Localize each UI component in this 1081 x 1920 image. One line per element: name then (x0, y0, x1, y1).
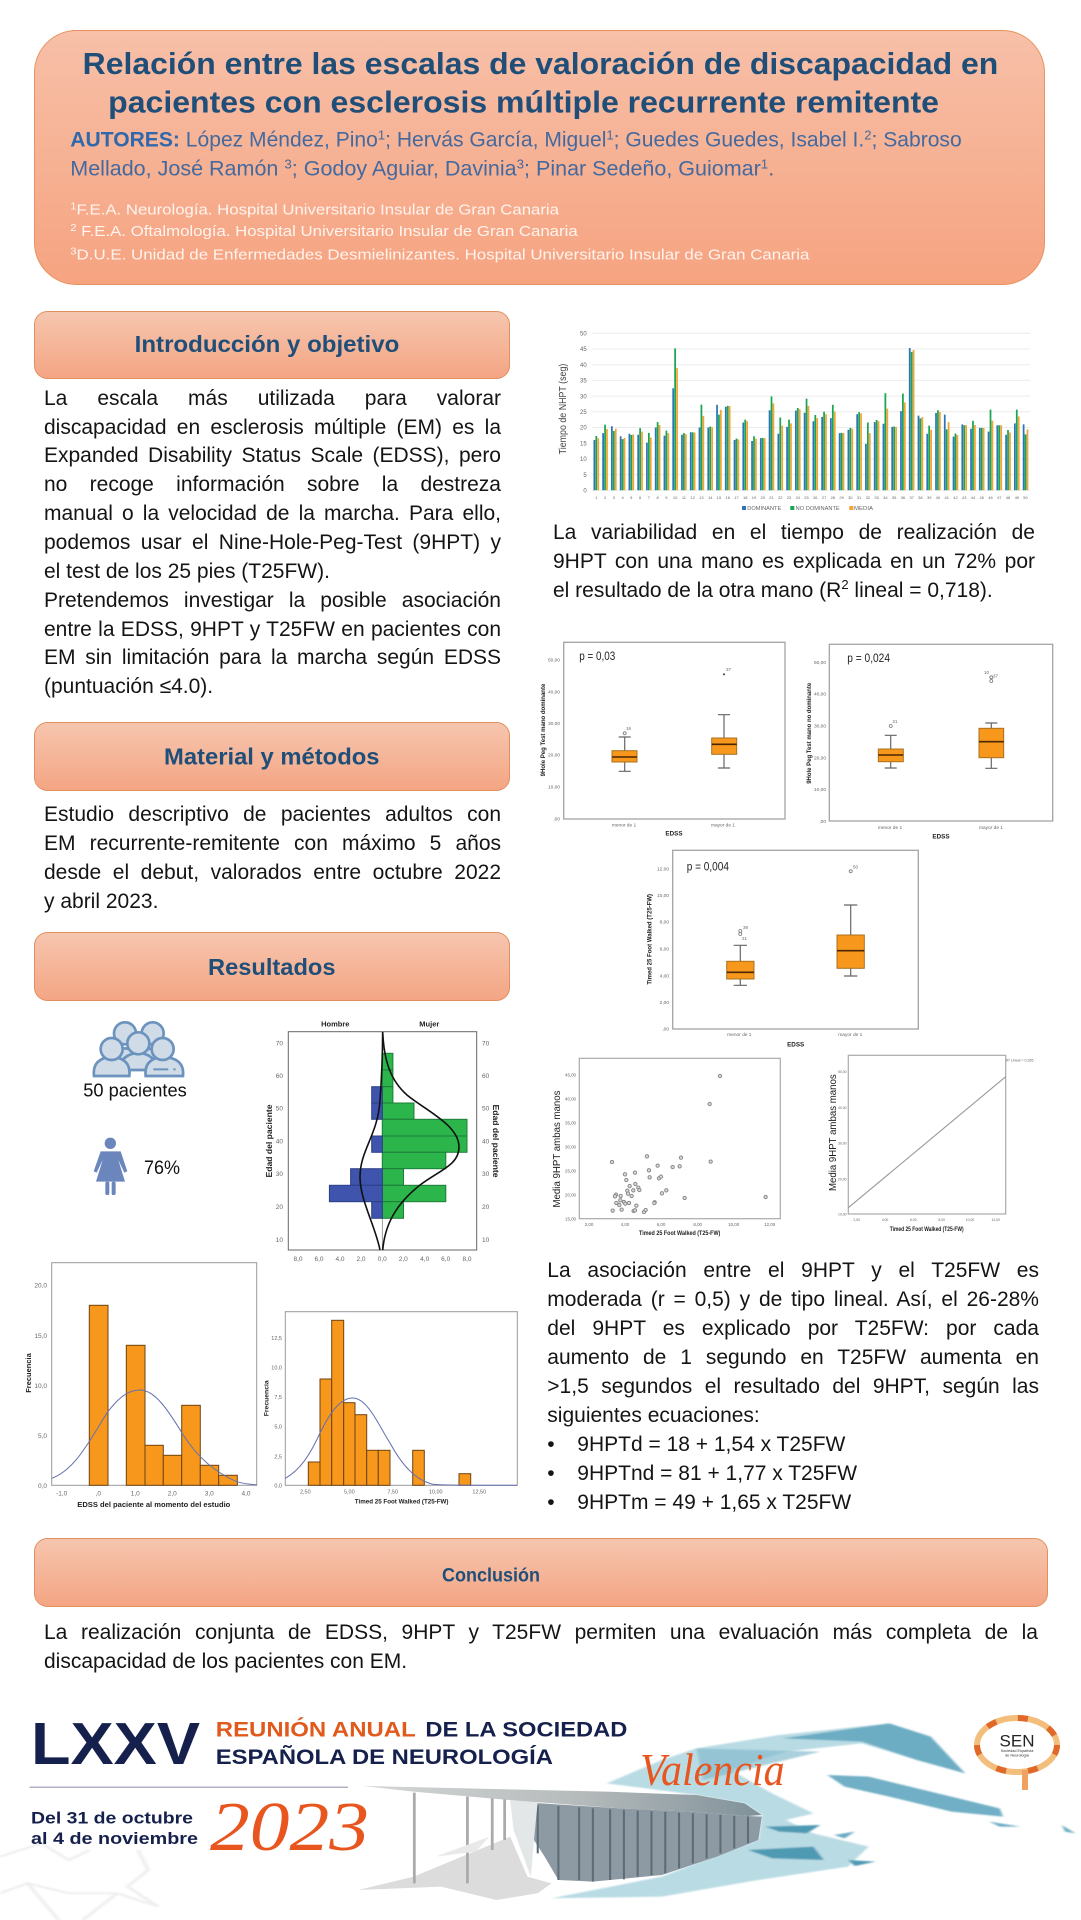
text block: methods: desde el debut, valorados entre octubre 2022 (44, 861, 501, 884)
chart: scatter T25FW vs 9HPT: 12,00 (764, 1222, 776, 1227)
chart: NHPT grouped bars by patient: MEDIA (854, 506, 873, 512)
text block: introduction: EM sin limitación para la marcha según EDSS (44, 646, 501, 669)
chart: boxplot non-dominant hand: menor de 1 (878, 825, 902, 831)
text block: conclusion: La realización conjunta de EDSS, 9HPT y T25FW permiten una evaluación más completa de la (44, 1621, 1038, 1644)
chart: boxplot T25FW: Timed 25 Foot Walked (T25-FW) (648, 894, 654, 985)
chart: boxplot T25FW: 39 (743, 925, 749, 930)
chart: NHPT grouped bars by patient: 31 (857, 495, 862, 500)
chart: NHPT grouped bars by patient: 40 (580, 363, 587, 369)
chart: age pyramid by sex: 6,0 (314, 1256, 324, 1263)
chart: NHPT grouped bars by patient: 3 (613, 495, 616, 500)
chart: boxplot dominant hand: p = 0,03 (579, 651, 615, 663)
chart: boxplot T25FW (648, 850, 918, 1048)
header panel (34, 30, 1044, 284)
chart: age pyramid by sex: 2,0 (356, 1256, 366, 1263)
chart: boxplot T25FW: menor de 1 (727, 1032, 752, 1038)
text block: introduction: podemos usar el Nine-Hole-Peg-Test (9HPT) y (44, 531, 501, 554)
chart: boxplot dominant hand: 30,00 (548, 721, 560, 727)
chart: boxplot non-dominant hand: 40,00 (814, 692, 826, 698)
chart: T25FW histogram: 5,0 (274, 1425, 282, 1431)
text block: association and equations: 9HPTm = 49 + 1,65 x T25FW (577, 1491, 851, 1514)
authors: Mellado, José Ramón (70, 158, 273, 181)
title: Relación entre las escalas de valoración de discapacidad en (83, 46, 998, 81)
chart: NHPT grouped bars by patient: 9 (665, 495, 668, 500)
chart: NHPT grouped bars by patient: 44 (971, 495, 976, 500)
text block: association and equations: aumento de 1 segundo en T25FW aumenta en (547, 1346, 1039, 1369)
chart: NHPT grouped bars by patient: 8 (656, 495, 659, 500)
chart: NHPT grouped bars by patient: 5 (630, 495, 633, 500)
chart: regression line: 40,00 (838, 1106, 847, 1110)
chart: NHPT grouped bars by patient: 39 (927, 495, 932, 500)
chart: boxplot T25FW: 12,00 (657, 866, 669, 872)
chart: age pyramid by sex (265, 1020, 500, 1263)
authors: 1 (378, 128, 385, 143)
text block: introduction (44, 387, 501, 698)
chart: NHPT grouped bars by patient: 28 (831, 495, 836, 500)
chart: EDSS histogram: 5,0 (38, 1433, 47, 1440)
chart: regression line: 12,00 (991, 1218, 1000, 1222)
section heading: conclusión: Conclusión (442, 1564, 540, 1586)
authors: . (768, 158, 774, 181)
watercolour splash (552, 1723, 1075, 1898)
text block: association and equations: • (547, 1491, 555, 1514)
chart: NHPT grouped bars by patient: 4 (621, 495, 624, 500)
chart: EDSS histogram: ,0 (96, 1490, 101, 1498)
chart: age pyramid by sex: 0,0 (378, 1256, 387, 1263)
text block: association and equations: 9HPTnd = 81 + 1,77 x T25FW (577, 1462, 857, 1485)
event name (216, 1718, 627, 1769)
chart: NHPT grouped bars by patient: 24 (796, 495, 801, 500)
icon: patient group (94, 1022, 183, 1076)
chart: NHPT grouped bars by patient: 25 (804, 495, 809, 500)
chart: NHPT grouped bars by patient: 36 (901, 495, 906, 500)
authors: ; Sabroso (872, 129, 962, 152)
chart: T25FW histogram: 5,00 (344, 1490, 355, 1496)
chart: age pyramid by sex: 70 (482, 1040, 490, 1048)
chart: EDSS histogram: Frecuencia (24, 1352, 33, 1393)
chart: age pyramid by sex: Edad del paciente (491, 1104, 500, 1178)
chart: scatter T25FW vs 9HPT (552, 1058, 780, 1237)
affiliations: F.E.A. Oftalmología. Hospital Universitario Insular de Gran Canaria (77, 223, 578, 240)
text block: introduction: discapacidad en esclerosis múltiple (EM) es la (44, 416, 501, 439)
text block: methods (44, 803, 501, 913)
chart: NHPT grouped bars by patient: 21 (769, 495, 774, 500)
chart: boxplot T25FW: 50 (853, 864, 859, 870)
chart: boxplot dominant hand: 40,00 (548, 689, 560, 695)
chart: NHPT grouped bars by patient: 2 (604, 495, 607, 500)
affiliations (70, 201, 810, 263)
chart: age pyramid by sex: 60 (482, 1073, 490, 1080)
chart: NHPT grouped bars by patient: 13 (699, 495, 704, 500)
chart: boxplot dominant hand: 37 (726, 667, 732, 672)
chart: EDSS histogram: 3,0 (205, 1490, 214, 1498)
chart: scatter T25FW vs 9HPT: Media 9HPT ambas manos (552, 1090, 563, 1208)
chart: NHPT grouped bars by patient: DOMINANTE (747, 506, 782, 512)
chart: boxplot non-dominant hand: ,00 (819, 819, 826, 825)
chart: age pyramid by sex: Edad del paciente (265, 1104, 274, 1178)
chart: regression line: 20,00 (838, 1177, 847, 1181)
chart: regression line: Timed 25 Foot Walked (T25-FW) (890, 1227, 964, 1233)
female percentage: 76% (144, 1158, 180, 1179)
chart: scatter T25FW vs 9HPT: 40,00 (565, 1097, 577, 1102)
chart: NHPT grouped bars by patient: 42 (953, 495, 958, 500)
chart: NHPT grouped bars by patient: 45 (979, 495, 985, 500)
chart: boxplot T25FW: mayor de 1 (838, 1032, 863, 1038)
chart: scatter T25FW vs 9HPT: 4,00 (621, 1222, 630, 1227)
chart: NHPT grouped bars by patient: 20 (580, 426, 587, 432)
chart: NHPT grouped bars by patient: 45 (580, 347, 587, 353)
text block: association and equations: • (547, 1433, 555, 1456)
logo: SEN (977, 1718, 1057, 1790)
chart: regression line: 8,00 (938, 1218, 945, 1222)
chart: T25FW histogram: 10,0 (271, 1366, 282, 1372)
text block: methods: y abril 2023. (44, 890, 158, 913)
chart: NHPT grouped bars by patient: 17 (734, 495, 739, 500)
chart: NHPT grouped bars by patient: 15 (580, 441, 587, 447)
chart: EDSS histogram: 4,0 (241, 1490, 251, 1498)
chart: boxplot non-dominant hand: 21 (892, 719, 898, 724)
patient count: 50 pacientes (83, 1081, 187, 1101)
logo: SEN: SEN (1000, 1732, 1034, 1751)
chart: NHPT grouped bars by patient: 10 (673, 495, 678, 500)
title: pacientes con esclerosis múltiple recurrente remitente (108, 85, 939, 120)
chart: NHPT grouped bars by patient: 16 (725, 495, 731, 500)
chart: NHPT grouped bars by patient: 32 (866, 495, 871, 500)
chart: boxplot T25FW: 6,00 (660, 946, 669, 952)
chart: NHPT grouped bars by patient: 41 (944, 495, 950, 500)
chart: EDSS histogram: -1,0 (56, 1490, 68, 1498)
chart: NHPT grouped bars by patient: 40 (936, 495, 941, 500)
section heading: introducción y objetivo (34, 312, 510, 378)
chart: scatter T25FW vs 9HPT: Timed 25 Foot Walked (T25-FW) (639, 1231, 720, 1237)
section heading: introducción y objetivo: Introducción y objetivo (135, 331, 399, 357)
chart: NHPT grouped bars by patient: 33 (874, 495, 880, 500)
chart: scatter T25FW vs 9HPT: 6,00 (657, 1222, 666, 1227)
chart: EDSS histogram: 10,0 (34, 1383, 47, 1390)
chart: scatter T25FW vs 9HPT: 25,00 (565, 1169, 577, 1174)
chart: boxplot non-dominant hand: 10,00 (814, 787, 826, 793)
vein decoration (0, 1843, 159, 1920)
chart: boxplot dominant hand (541, 642, 785, 838)
chart: T25FW histogram: 10,00 (429, 1490, 443, 1496)
text block: introduction: entre la EDSS, 9HPT y T25FW en pacientes con (44, 618, 501, 641)
chart: age pyramid by sex: Mujer (419, 1020, 439, 1029)
chart: NHPT grouped bars by patient: 15 (717, 495, 722, 500)
authors: ; Guedes Guedes, Isabel I. (614, 129, 864, 152)
text block: introduction: (puntuación ≤4.0). (44, 675, 213, 698)
chart: age pyramid by sex: 40 (276, 1138, 283, 1146)
section heading: resultados (34, 932, 510, 1000)
chart: NHPT grouped bars by patient: 35 (892, 495, 897, 500)
authors: 2 (864, 128, 872, 143)
text block: association and equations: 9HPTd = 18 + 1,54 x T25FW (577, 1433, 845, 1456)
authors: ; Godoy Aguiar, Davinia (292, 158, 517, 181)
chart: boxplot non-dominant hand: 50,00 (814, 660, 826, 666)
chart: regression line: 50,00 (838, 1070, 847, 1074)
chart: age pyramid by sex: 10 (276, 1237, 283, 1244)
text block: introduction: Expanded Disability Status Scale (EDSS), pero (44, 444, 501, 467)
chart: regression line: 2,00 (853, 1218, 860, 1222)
chart: NHPT grouped bars by patient: 35 (580, 379, 587, 385)
chart: NHPT grouped bars by patient: 47 (997, 495, 1002, 500)
affiliations: 1 (70, 201, 77, 212)
chart: boxplot T25FW: 10,00 (657, 893, 669, 899)
chart: EDSS histogram: 15,0 (34, 1333, 47, 1340)
authors: ; Hervás García, Miguel (385, 129, 606, 152)
chart: scatter T25FW vs 9HPT: 2,00 (585, 1222, 594, 1227)
chart: NHPT grouped bars by patient: 29 (839, 495, 845, 500)
chart: NHPT grouped bars by patient: 50 (1023, 495, 1028, 500)
text block: methods: EM recurrente-remitente con máximo 5 años (44, 832, 501, 855)
chart: scatter T25FW vs 9HPT: 45,00 (565, 1073, 577, 1078)
chart: boxplot non-dominant hand: p = 0,024 (847, 653, 891, 665)
chart: NHPT grouped bars by patient: 11 (682, 495, 687, 500)
chart: regression line: R² Lineal = 0,265 (1006, 1058, 1033, 1062)
chart: scatter T25FW vs 9HPT: 20,00 (565, 1193, 577, 1198)
chart: regression line: Media 9HPT ambas manos (828, 1074, 839, 1191)
chart: regression line: 6,00 (910, 1218, 917, 1222)
event dates: al 4 de noviembre (31, 1829, 198, 1848)
affiliations: 3 (70, 246, 77, 257)
text block: hand variability: 9HPT con una mano es explicada en un 72% por (553, 550, 1035, 573)
event name: ESPAÑOLA DE NEUROLOGÍA (216, 1746, 553, 1769)
text block: methods: Estudio descriptivo de pacientes adultos con (44, 803, 501, 826)
chart: NHPT grouped bars by patient: 26 (813, 495, 818, 500)
chart: boxplot dominant hand: ,00 (553, 817, 560, 823)
chart: boxplot T25FW: ,00 (662, 1027, 669, 1033)
chart: NHPT grouped bars by patient: 34 (883, 495, 888, 500)
text block: introduction: no recoge información sobre la destreza (44, 473, 501, 496)
chart: NHPT grouped bars by patient: 25 (580, 410, 587, 416)
chart: NHPT grouped bars by patient: 37 (909, 495, 915, 500)
chart: NHPT grouped bars by patient: 19 (752, 495, 757, 500)
authors: 3 (517, 157, 524, 172)
event name: REUNIÓN ANUAL (216, 1718, 416, 1742)
chart: age pyramid by sex: 50 (276, 1106, 283, 1112)
chart: NHPT grouped bars by patient: 7 (648, 495, 651, 500)
chart: boxplot dominant hand: menor de 1 (612, 822, 636, 828)
logo: SEN: de Neurología (1005, 1754, 1030, 1758)
chart: NHPT grouped bars by patient (558, 332, 1030, 512)
chart: boxplot non-dominant hand: 30,00 (814, 723, 826, 729)
icon: woman (94, 1138, 127, 1195)
chart: NHPT grouped bars by patient: 18 (743, 495, 748, 500)
authors: AUTORES: López Méndez, Pino (70, 129, 377, 152)
chart: age pyramid by sex: 8,0 (293, 1256, 303, 1263)
chart: regression line: 4,00 (882, 1218, 888, 1222)
text block: association and equations (547, 1259, 1039, 1514)
chart: age pyramid by sex: 8,0 (462, 1256, 472, 1263)
chart: boxplot dominant hand: 50,00 (548, 658, 560, 664)
chart: NHPT grouped bars by patient: 22 (778, 495, 783, 500)
chart: EDSS histogram: 2,0 (168, 1490, 177, 1498)
chart: EDSS histogram (24, 1263, 257, 1509)
affiliations: D.U.E. Unidad de Enfermedades Desmielinizantes. Hospital Universitario Insular de Gran Canaria (77, 246, 810, 263)
chart: boxplot dominant hand: 16 (626, 726, 632, 731)
chart: NHPT grouped bars by patient: 43 (962, 495, 967, 500)
chart: NHPT grouped bars by patient: 38 (918, 495, 923, 500)
chart: boxplot T25FW: 21 (742, 936, 748, 941)
section heading: resultados: Resultados (208, 954, 336, 980)
text block: association and equations: siguientes ecuaciones: (547, 1404, 760, 1427)
section heading: material y métodos (34, 722, 510, 790)
chart: scatter T25FW vs 9HPT: 35,00 (565, 1120, 577, 1125)
chart: boxplot dominant hand: 20,00 (548, 753, 560, 759)
text block: hand variability: La variabilidad en el tiempo de realización de (553, 521, 1035, 544)
chart: EDSS histogram: 1,0 (131, 1490, 140, 1498)
chart: age pyramid by sex: 2,0 (399, 1256, 408, 1263)
chart: scatter T25FW vs 9HPT: 15,00 (565, 1217, 577, 1222)
event dates (31, 1808, 198, 1848)
chart: EDSS histogram: 0,0 (38, 1483, 47, 1490)
chart: boxplot dominant hand: EDSS (665, 831, 683, 838)
chart: boxplot T25FW: 4,00 (660, 973, 669, 979)
chart: regression line: 10,00 (966, 1218, 974, 1222)
text block: association and equations: del 9HPT es explicado por T25FW: por cada (547, 1317, 1039, 1340)
chart: boxplot T25FW: 8,00 (660, 920, 669, 926)
authors: 3 (284, 157, 292, 172)
chart: T25FW histogram: 12,5 (271, 1336, 282, 1342)
chart: EDSS histogram: EDSS del paciente al momento del estudio (77, 1500, 231, 1509)
chart: age pyramid by sex: 20 (276, 1204, 283, 1211)
chart: T25FW histogram: Timed 25 Foot Walked (T25-FW) (355, 1498, 448, 1505)
chart: EDSS histogram: 20,0 (34, 1282, 47, 1290)
chart: age pyramid by sex: 70 (276, 1040, 283, 1048)
chart: NHPT grouped bars by patient: 30 (580, 394, 587, 400)
text block: conclusion: discapacidad de los pacientes con EM. (44, 1650, 407, 1673)
chart: boxplot T25FW: EDSS (787, 1041, 804, 1048)
authors: ; Pinar Sedeño, Guiomar (524, 158, 761, 181)
text block: association and equations: moderada (r = 0,5) y de tipo lineal. Así, el 26-28% (547, 1288, 1039, 1311)
chart: age pyramid by sex: 10 (482, 1237, 490, 1244)
chart: T25FW histogram: 2,50 (300, 1490, 311, 1496)
title (83, 46, 998, 120)
chart: boxplot non-dominant hand (807, 644, 1053, 840)
chart: regression line: 10,00 (838, 1212, 847, 1216)
chart: NHPT grouped bars by patient: 6 (639, 495, 642, 500)
text block: association and equations: • (547, 1462, 555, 1485)
chart: NHPT grouped bars by patient: NO DOMINANTE (796, 506, 840, 512)
chart: boxplot T25FW: 2,00 (660, 1000, 669, 1006)
text block: introduction: La escala más utilizada para valorar (44, 387, 501, 410)
event dates: Del 31 de octubre (31, 1808, 193, 1827)
text block: association and equations: >1,5 segundos el resultado del 9HPT, según las (547, 1375, 1039, 1398)
chart: age pyramid by sex: Hombre (321, 1020, 349, 1029)
chart: NHPT grouped bars by patient: 12 (690, 495, 696, 500)
logo: SEN: Sociedad Española (1001, 1749, 1034, 1753)
chart: T25FW histogram: 0,0 (274, 1483, 282, 1489)
chart: scatter T25FW vs 9HPT: 8,00 (693, 1222, 703, 1227)
chart: boxplot non-dominant hand: 9Hole Peg Test mano no dominante (807, 682, 813, 784)
chart: NHPT grouped bars by patient: 27 (822, 495, 827, 500)
chart: boxplot dominant hand: 9Hole Peg Test mano dominante (541, 683, 547, 776)
chart: NHPT grouped bars by patient: 48 (1006, 495, 1011, 500)
event numeral: LXXV (31, 1711, 200, 1777)
chart: NHPT grouped bars by patient: 50 (580, 332, 587, 338)
section heading: material y métodos: Material y métodos (164, 744, 380, 770)
text block: association and equations: La asociación entre el 9HPT y el T25FW es (547, 1259, 1039, 1282)
section heading: conclusión (34, 1538, 1048, 1606)
chart: regression line (828, 1055, 1033, 1233)
text block: introduction: manual o la velocidad de la marcha. Para ello, (44, 502, 501, 525)
building illustration (358, 1786, 762, 1900)
footer banner (0, 1711, 1075, 1920)
chart: T25FW histogram: 7,50 (387, 1490, 398, 1496)
text block: conclusion (44, 1621, 1038, 1673)
chart: NHPT grouped bars by patient: 0 (583, 488, 587, 494)
affiliations: F.E.A. Neurología. Hospital Universitario Insular de Gran Canaria (77, 201, 560, 218)
chart: age pyramid by sex: 40 (482, 1138, 490, 1146)
chart: NHPT grouped bars by patient: 5 (583, 473, 587, 479)
chart: NHPT grouped bars by patient: 14 (708, 495, 713, 500)
chart: boxplot dominant hand: 10,00 (548, 784, 560, 790)
chart: boxplot dominant hand: mayor de 1 (711, 822, 735, 828)
chart: age pyramid by sex: 50 (482, 1106, 490, 1112)
text block: hand variability: el resultado de la otra mano (R2 lineal = 0,718). (553, 577, 993, 602)
chart: boxplot non-dominant hand: 37 (993, 674, 999, 678)
chart: T25FW histogram: 12,50 (472, 1490, 486, 1496)
chart: NHPT grouped bars by patient: Tiempo de NHPT (seg) (558, 364, 569, 454)
chart: NHPT grouped bars by patient: 10 (580, 457, 587, 463)
chart: boxplot T25FW: p = 0,004 (687, 862, 730, 874)
chart: boxplot non-dominant hand: mayor de 1 (979, 825, 1003, 831)
affiliations: 2 (70, 223, 77, 234)
chart: age pyramid by sex: 30 (482, 1171, 490, 1178)
year: 2023 (210, 1789, 369, 1866)
text block: introduction: Pretendemos investigar la posible asociación (44, 589, 501, 612)
chart: regression line: 30,00 (838, 1142, 847, 1146)
city: Valencia (640, 1744, 785, 1795)
chart: T25FW histogram: 2,5 (274, 1454, 282, 1460)
chart: NHPT grouped bars by patient: 23 (787, 495, 792, 500)
chart: T25FW histogram: 7,5 (274, 1395, 282, 1401)
chart: NHPT grouped bars by patient: 46 (988, 495, 993, 500)
text block: hand variability (553, 521, 1035, 602)
text block: introduction: el test de los 25 pies (T25FW). (44, 560, 330, 583)
chart: scatter T25FW vs 9HPT: 10,00 (728, 1222, 740, 1227)
authors: 1 (606, 128, 614, 143)
authors (70, 128, 962, 181)
chart: T25FW histogram: Frecuencia (264, 1380, 270, 1416)
chart: T25FW histogram (264, 1312, 517, 1505)
chart: NHPT grouped bars by patient: 49 (1015, 495, 1020, 500)
chart: age pyramid by sex: 4,0 (335, 1256, 345, 1263)
chart: age pyramid by sex: 6,0 (441, 1256, 451, 1263)
chart: NHPT grouped bars by patient: 20 (760, 495, 766, 500)
event name: DE LA SOCIEDAD (425, 1719, 627, 1742)
chart: boxplot non-dominant hand: 20,00 (814, 755, 826, 761)
chart: age pyramid by sex: 20 (482, 1204, 490, 1211)
chart: NHPT grouped bars by patient: 1 (595, 495, 598, 500)
chart: scatter T25FW vs 9HPT: 30,00 (565, 1144, 577, 1149)
chart: age pyramid by sex: 4,0 (420, 1256, 430, 1263)
chart: age pyramid by sex: 60 (276, 1073, 283, 1080)
chart: NHPT grouped bars by patient: 30 (848, 495, 853, 500)
chart: boxplot non-dominant hand: EDSS (932, 834, 950, 840)
chart: age pyramid by sex: 30 (276, 1171, 283, 1178)
chart: boxplot non-dominant hand: 10 (984, 670, 990, 675)
authors: 1 (761, 157, 768, 172)
